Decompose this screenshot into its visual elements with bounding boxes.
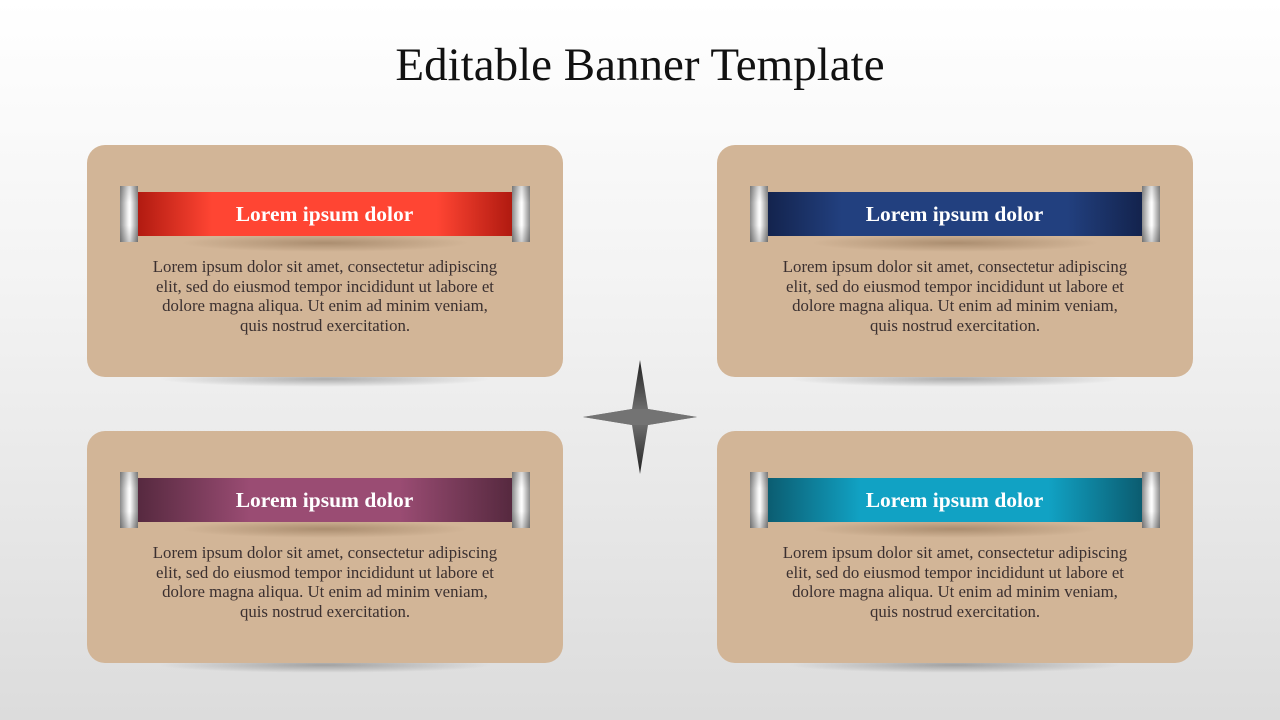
icon: four-point star <box>583 360 697 474</box>
text block: Lorem ipsum dolor sit amet, consectetur adipiscing <box>153 543 497 562</box>
banner: plum: Lorem ipsum dolor <box>236 488 413 512</box>
text block: dolore magna aliqua. Ut enim ad minim veniam, <box>162 296 488 315</box>
panel: bottom-left <box>87 431 563 672</box>
text block: quis nostrud exercitation. <box>870 316 1040 334</box>
text block: quis nostrud exercitation. <box>240 316 410 334</box>
panel: bottom-right <box>717 431 1193 672</box>
text block: elit, sed do eiusmod tempor incididunt ut labore et <box>156 562 494 582</box>
banner: teal <box>750 472 1160 536</box>
text block: Lorem ipsum dolor sit amet, consectetur adipiscing <box>153 257 497 276</box>
banner: navy: Lorem ipsum dolor <box>866 202 1043 226</box>
panel: top-left <box>87 145 563 386</box>
text block: dolore magna aliqua. Ut enim ad minim veniam, <box>792 582 1118 601</box>
banner: navy <box>750 186 1160 250</box>
text block: elit, sed do eiusmod tempor incididunt ut labore et <box>786 562 1124 582</box>
text block: dolore magna aliqua. Ut enim ad minim veniam, <box>162 582 488 601</box>
text block: quis nostrud exercitation. <box>240 602 410 620</box>
banner: plum <box>120 472 530 536</box>
text block: Lorem ipsum dolor sit amet, consectetur adipiscing <box>783 543 1127 562</box>
text block <box>783 257 1127 334</box>
banner: teal: Lorem ipsum dolor <box>866 488 1043 512</box>
text block: Lorem ipsum dolor sit amet, consectetur adipiscing <box>783 257 1127 276</box>
text block: elit, sed do eiusmod tempor incididunt ut labore et <box>786 276 1124 296</box>
title: Editable Banner Template <box>395 39 885 91</box>
text block: elit, sed do eiusmod tempor incididunt ut labore et <box>156 276 494 296</box>
text block: quis nostrud exercitation. <box>870 602 1040 620</box>
panel: top-right <box>717 145 1193 386</box>
text block: dolore magna aliqua. Ut enim ad minim veniam, <box>792 296 1118 315</box>
text block <box>153 543 497 620</box>
banner: red <box>120 186 530 250</box>
banner: red: Lorem ipsum dolor <box>236 202 413 226</box>
text block <box>153 257 497 334</box>
text block <box>783 543 1127 620</box>
